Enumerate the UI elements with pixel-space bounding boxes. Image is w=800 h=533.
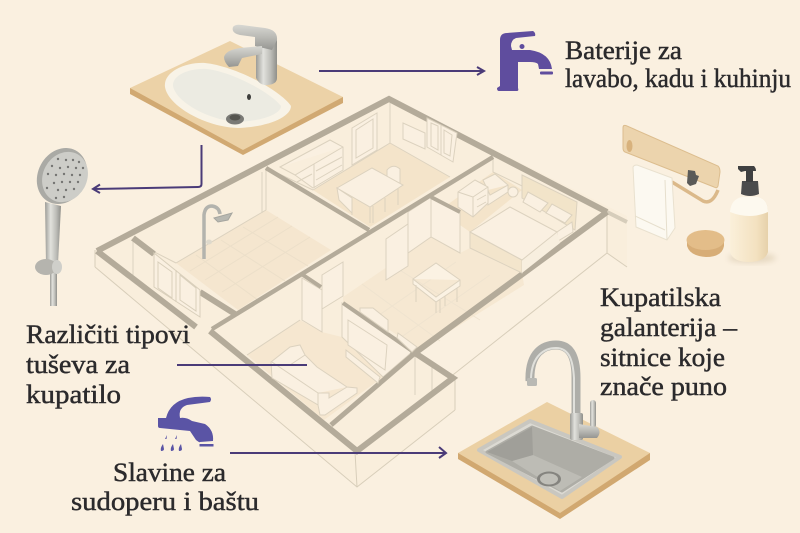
hook [687,170,699,186]
window left [154,253,200,317]
chrome faucet [256,40,277,85]
label: bath accessories [600,283,738,401]
label: taps [71,458,259,516]
label: showers: tuševa za [26,350,130,379]
interior base [100,100,607,450]
hose [50,262,57,306]
soap dish [687,240,724,257]
floor plan [95,97,627,487]
label: bath accessories: Kupatilska [600,283,721,312]
label: showers [26,320,190,409]
kitchen sink illustration [458,345,650,519]
label: taps: sudoperu i baštu [71,487,259,516]
wooden board [130,88,343,155]
label: bath accessories: galanterija – [600,313,738,342]
floors [176,210,331,310]
coffee table [413,263,460,313]
soap bottle [730,197,768,262]
towel [633,165,675,240]
wooden counter [458,453,650,519]
label: faucets: lavabo, kadu i kuhinju [565,64,791,93]
label: showers: Različiti tipovi [26,320,190,349]
bath accessories illustration [623,125,776,263]
label: bath accessories: znače puno [600,372,727,401]
walls [97,99,627,451]
label: faucets [565,36,791,93]
connector: basin to shower [93,145,202,193]
connector: shower label [177,364,307,366]
drain [537,472,561,486]
bedroom furniture [458,174,577,273]
handle [45,202,61,264]
label: taps: Slavine za [113,458,226,487]
connector: basin to faucet icon [319,67,484,75]
plan shower [204,206,232,259]
clip [35,259,57,275]
ceramic basin [165,63,291,128]
icon: purple faucet [497,31,553,91]
wooden rail [623,125,720,188]
rail peg [626,140,632,152]
towel ring [672,182,718,202]
exterior faces [95,97,627,487]
wall elevation lines [131,103,545,395]
living room furniture [271,308,417,415]
label: showers: kupatilo [26,380,121,409]
label: bath accessories: sitnice koje [600,343,725,372]
shadow [728,253,776,263]
floor tiles [190,217,310,300]
hand shower illustration [27,139,97,306]
washbasin illustration [130,25,343,155]
connector: tap to kitchen sink [230,447,446,458]
nozzles [46,158,84,199]
head [27,139,97,213]
tall faucet [530,345,576,420]
partition wall panels [302,197,460,332]
label: faucets: Baterije za [565,36,682,65]
dining room furniture [280,113,457,223]
steel sink [479,421,620,497]
icon: dripping tap [158,397,214,451]
